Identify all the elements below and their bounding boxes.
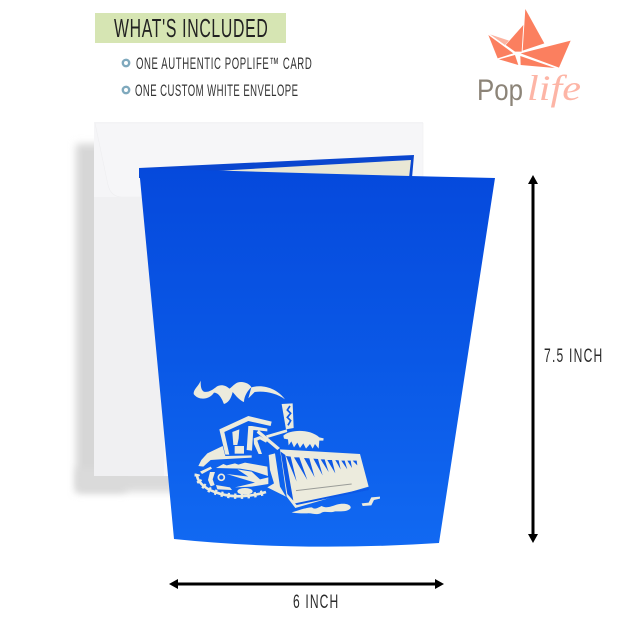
- list item: poplife card: ONE AUTHENTIC POPLIFE™ CARD: [136, 54, 312, 73]
- exhaust stack: [282, 403, 294, 429]
- arrow: vertical height dimension: [528, 175, 538, 543]
- arrow: horizontal width dimension: [169, 579, 444, 589]
- engine hood with vents: [283, 431, 324, 449]
- blade arm: [267, 453, 286, 497]
- blade: [280, 449, 369, 508]
- logo: poplife origami boat: [477, 9, 581, 108]
- smoke plume: [194, 381, 251, 404]
- logo: poplife origami boat: life: [527, 68, 581, 108]
- label: 6 inch: 6 INCH: [293, 591, 338, 613]
- ground debris: [292, 504, 351, 514]
- list item: envelope: ONE CUSTOM WHITE ENVELOPE: [135, 81, 298, 100]
- heading banner: what's included: WHAT'S INCLUDED: [114, 15, 268, 43]
- label: 7.5 inch: 7.5 INCH: [544, 345, 602, 367]
- icon: cut-out bulldozer: [194, 381, 380, 514]
- pop-up card: [139, 155, 495, 547]
- back panel of card: [139, 155, 414, 178]
- envelope flap: [95, 123, 423, 197]
- front cover of card: [139, 168, 495, 547]
- list of included items: [123, 54, 312, 100]
- envelope with shadow: [76, 122, 423, 492]
- hull and tracks: [197, 446, 268, 496]
- logo: poplife origami boat: Pop: [477, 74, 523, 107]
- cab: [219, 416, 287, 455]
